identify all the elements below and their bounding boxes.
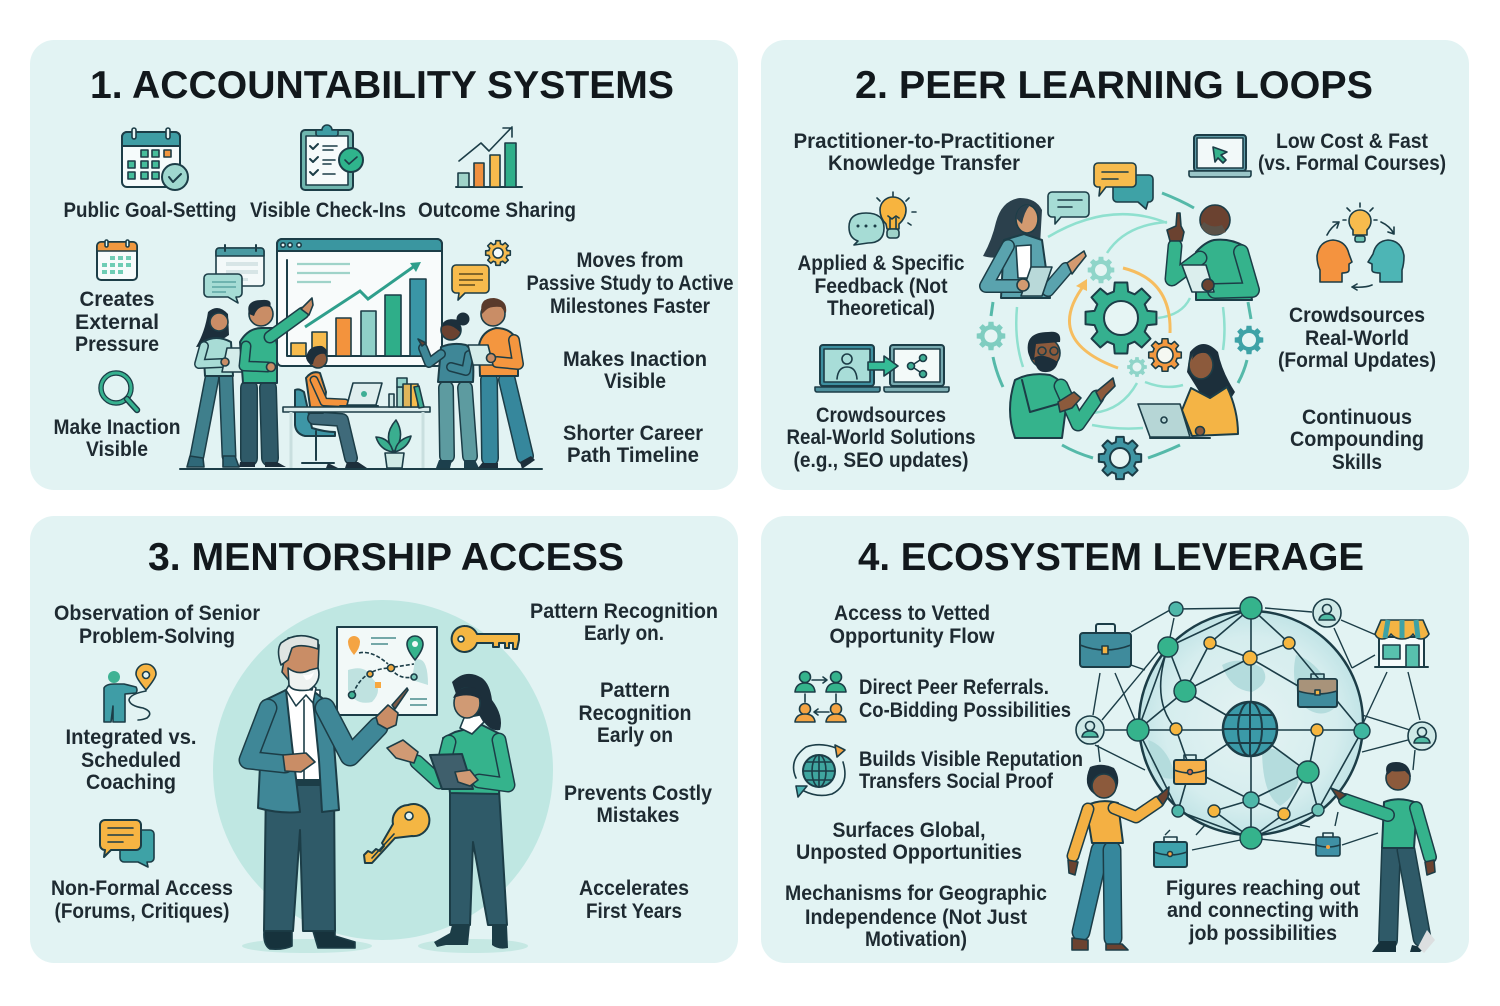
text: shorter career path <box>563 421 704 467</box>
central gear <box>1086 283 1156 353</box>
text: low cost and fast: (vs. Formal Courses) <box>1258 151 1446 175</box>
heading: accountability systems: 1. ACCOUNTABILITY SYSTEMS <box>90 64 674 107</box>
icon: peer referrals <box>795 672 846 722</box>
text: pattern recognition early on <box>578 678 692 747</box>
key: horizontal <box>452 626 519 652</box>
icon: magnifier <box>101 373 137 410</box>
person: man raising finger <box>1167 205 1252 300</box>
label: public goal-setting: Public Goal-Setting <box>64 198 236 222</box>
text: shorter career path: Path Timeline <box>567 443 699 467</box>
text: crowdsources solutions: Real-World Solutions <box>786 425 976 449</box>
text: accelerates first years: First Years <box>586 899 682 923</box>
yellow nodes <box>1170 637 1323 820</box>
text: crowdsources formal updates: Real-World <box>1305 326 1409 350</box>
text: practitioner knowledge transfer <box>794 129 1055 175</box>
person: man pointing <box>239 298 313 467</box>
text: non-formal access: (Forums, Critiques) <box>54 899 230 923</box>
text: pattern recognition early on. <box>530 599 718 645</box>
text: crowdsources formal updates <box>1278 303 1436 372</box>
text: pattern recognition early on.: Early on. <box>584 621 664 645</box>
yellow speech bubble <box>452 265 489 300</box>
text: observation of senior problem-solving: Problem-Solving <box>79 624 235 648</box>
person: man in orange <box>468 298 535 469</box>
text: pattern recognition early on: Recognition <box>578 701 692 725</box>
heading: ecosystem leverage: 4. ECOSYSTEM LEVERAGE <box>858 536 1364 579</box>
text: integrated vs scheduled coaching: Integrated vs. <box>66 725 196 749</box>
text: mechanisms for geographic independence: Mechanisms for Geographic <box>785 881 1047 905</box>
text: integrated vs scheduled coaching: Coaching <box>86 770 176 794</box>
text: applied and specific feedback: Applied & Specific <box>798 251 965 275</box>
briefcase: bottom left <box>1154 837 1187 867</box>
icon: storefront <box>1375 620 1429 667</box>
text: accelerates first years: Accelerates <box>579 876 689 900</box>
person: woman with laptop <box>1138 344 1238 438</box>
text: make inaction visible: Visible <box>86 437 148 461</box>
central globe <box>1223 702 1277 756</box>
icon: growth chart <box>456 127 522 187</box>
arrowhead <box>1076 279 1087 291</box>
person: woman reaching <box>1068 765 1169 950</box>
text: continuous compounding skills <box>1290 405 1424 474</box>
books <box>389 378 424 408</box>
text: pattern recognition early on.: Pattern Recognition <box>530 599 718 623</box>
text: mechanisms for geographic independence <box>785 881 1047 951</box>
text: builds visible reputation: Builds Visible Reputation <box>859 747 1083 771</box>
text: makes inaction visible: Visible <box>604 369 666 393</box>
briefcase: bottom right <box>1316 833 1340 856</box>
outer ring arcs <box>991 193 1251 458</box>
panel 1 background <box>30 40 738 490</box>
illustration: mentor and mentee <box>213 600 553 953</box>
text: applied and specific feedback: Feedback (Not <box>814 274 948 298</box>
background calendar <box>216 245 264 286</box>
ground shadows <box>242 939 372 953</box>
text: crowdsources solutions <box>786 403 976 472</box>
network links <box>1138 608 1362 838</box>
text: makes inaction visible: Makes Inaction <box>563 347 707 371</box>
text: figures reaching out: Figures reaching out <box>1166 876 1360 900</box>
person: man reaching <box>1331 762 1435 953</box>
bubble lines <box>459 274 483 285</box>
illustration: team around growth chart <box>180 239 542 469</box>
text: surfaces global opportunities: Unposted Opportunities <box>796 840 1022 864</box>
person: woman gesturing <box>418 312 479 468</box>
person: woman with tablet <box>983 198 1086 298</box>
text: moves from passive study: Milestones Faster <box>550 294 711 318</box>
text: make inaction visible <box>54 415 180 461</box>
text: makes inaction visible <box>563 347 707 393</box>
text: accelerates first years <box>579 876 689 923</box>
text: moves from passive study: Passive Study to Active <box>526 271 734 295</box>
plant <box>376 420 411 468</box>
person: woman with tablet <box>187 308 250 467</box>
text: low cost and fast: Low Cost & Fast <box>1276 129 1428 153</box>
text: direct peer referrals <box>859 675 1071 722</box>
laptop <box>340 383 382 406</box>
illustration: peer learning cycle <box>977 163 1263 479</box>
text: crowdsources solutions: (e.g., SEO updates) <box>794 448 968 472</box>
person: senior mentor <box>248 636 408 949</box>
text: low cost and fast <box>1258 129 1446 175</box>
text: builds visible reputation <box>859 747 1083 793</box>
text: creates external pressure: Pressure <box>75 332 159 356</box>
icon: globe with arrows <box>794 745 845 797</box>
text: continuous compounding skills: Continuous <box>1302 405 1412 429</box>
icon: clipboard checklist <box>301 125 363 190</box>
text: prevents costly mistakes: Prevents Costly <box>564 781 712 805</box>
text: crowdsources solutions: Crowdsources <box>816 403 946 427</box>
icon: feedback bubble with bulb <box>849 192 916 245</box>
text: crowdsources formal updates: Crowdsources <box>1289 303 1425 327</box>
text: pattern recognition early on: Pattern <box>600 678 670 702</box>
text: direct peer referrals: Direct Peer Referrals. <box>859 675 1049 699</box>
text: non-formal access: Non-Formal Access <box>51 876 233 900</box>
label: outcome sharing: Outcome Sharing <box>418 198 576 222</box>
text: access to vetted opportunity flow <box>830 601 995 648</box>
briefcase: tan and teal <box>1298 674 1337 707</box>
text: shorter career path: Shorter Career <box>563 421 704 445</box>
key: diagonal <box>364 804 429 863</box>
desk <box>283 407 430 468</box>
text: moves from passive study: Moves from <box>576 248 684 272</box>
text: figures reaching out: job possibilities <box>1188 921 1337 945</box>
panel 4 background <box>761 516 1469 963</box>
background circle <box>213 600 553 940</box>
text: surfaces global opportunities <box>796 818 1022 864</box>
text: continuous compounding skills: Compounding <box>1290 427 1424 451</box>
text: figures reaching out: and connecting with <box>1167 898 1359 922</box>
bubble text lines <box>212 282 236 292</box>
text: make inaction visible: Make Inaction <box>54 415 180 439</box>
person: female mentee <box>387 674 508 949</box>
speech bubble <box>204 274 242 303</box>
text: applied and specific feedback <box>798 251 965 320</box>
speech bubbles <box>1048 163 1153 224</box>
text: integrated vs scheduled coaching <box>66 725 196 794</box>
panel: mentorship access <box>30 516 738 963</box>
text: prevents costly mistakes: Mistakes <box>596 803 680 827</box>
briefcase: large teal <box>1080 624 1131 667</box>
text: prevents costly mistakes <box>564 781 712 827</box>
icon: chat bubbles <box>100 820 154 867</box>
continents <box>1148 655 1338 806</box>
illustration: global opportunity network <box>1068 597 1436 953</box>
text: direct peer referrals: Co-Bidding Possibilities <box>859 698 1071 722</box>
text: non-formal access <box>51 876 233 923</box>
briefcase: orange <box>1174 755 1206 784</box>
panel: accountability systems <box>30 40 738 490</box>
text: access to vetted opportunity flow: Access to Vetted <box>834 601 990 625</box>
text: integrated vs scheduled coaching: Scheduled <box>81 748 181 772</box>
text: observation of senior problem-solving <box>54 601 261 648</box>
globe <box>1139 611 1363 835</box>
heading: peer learning loops: 2. PEER LEARNING LOOPS <box>855 64 1373 107</box>
text: mechanisms for geographic independence: Motivation) <box>865 927 967 951</box>
text: observation of senior problem-solving: Observation of Senior <box>54 601 261 625</box>
map board <box>337 627 437 715</box>
icon: calendar with check <box>122 128 188 190</box>
label: visible check-ins: Visible Check-Ins <box>250 198 406 222</box>
person: seated at desk <box>295 346 367 468</box>
text: mechanisms for geographic independence: Independence (Not Just <box>805 905 1027 929</box>
person: man with beard <box>1010 332 1115 438</box>
panel 2 background <box>761 40 1469 490</box>
icon: heads sharing idea <box>1317 203 1404 290</box>
ground shadow <box>418 939 528 953</box>
user circle icons <box>1076 599 1436 750</box>
text: figures reaching out <box>1166 876 1360 945</box>
text: practitioner knowledge transfer: Practitioner-to-Practitioner <box>794 129 1055 153</box>
green nodes <box>1127 597 1370 849</box>
text: creates external pressure <box>75 287 159 356</box>
text: access to vetted opportunity flow: Opportunity Flow <box>830 624 995 648</box>
text: practitioner knowledge transfer: Knowledge Transfer <box>828 151 1021 175</box>
text: builds visible reputation: Transfers Social Proof <box>859 769 1054 793</box>
text: creates external pressure: Creates <box>80 287 155 311</box>
inner ring arcs <box>1016 214 1224 429</box>
panel 3 background <box>30 516 738 963</box>
icon: mentor guiding path <box>104 664 156 722</box>
panel: ecosystem leverage <box>761 516 1469 963</box>
chart window <box>277 239 442 366</box>
icon: knowledge transfer laptops <box>815 345 949 392</box>
small gears <box>977 257 1263 479</box>
icon: gear <box>486 241 510 265</box>
outer links <box>1093 608 1420 850</box>
icon: laptop with cursor <box>1189 135 1251 177</box>
icon: orange calendar <box>97 240 137 280</box>
text: moves from passive study <box>526 248 734 318</box>
text: surfaces global opportunities: Surfaces Global, <box>832 818 986 842</box>
text: crowdsources formal updates: (Formal Updates) <box>1278 348 1436 372</box>
text: continuous compounding skills: Skills <box>1332 450 1382 474</box>
heading: mentorship access: 3. MENTORSHIP ACCESS <box>148 536 624 579</box>
text: applied and specific feedback: Theoretical) <box>827 296 935 320</box>
orange arcs <box>1069 268 1170 368</box>
ground line <box>180 468 542 470</box>
text: pattern recognition early on: Early on <box>597 723 673 747</box>
panel: peer learning loops <box>761 40 1469 490</box>
text: creates external pressure: External <box>75 310 159 334</box>
